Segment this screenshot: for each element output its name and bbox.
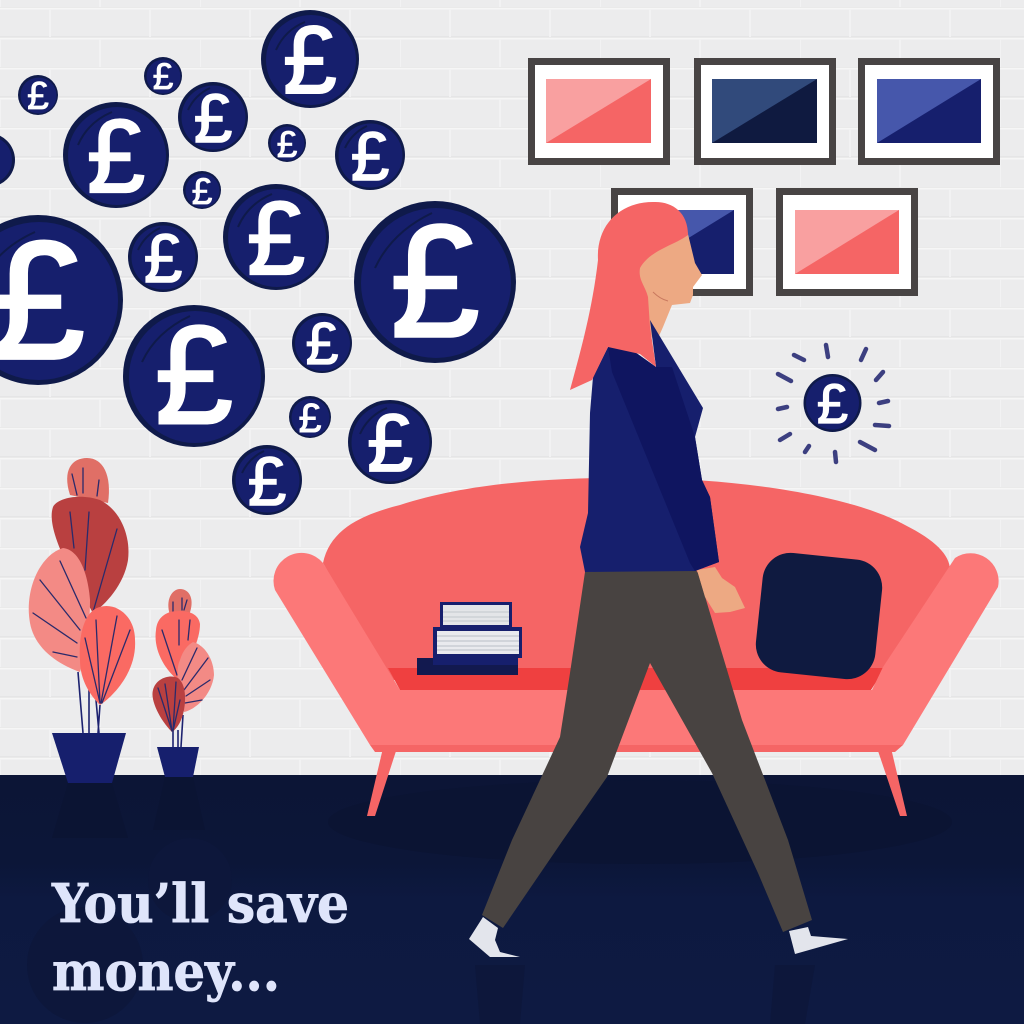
plant: small [152, 589, 214, 777]
caption: You'll save money: money... [52, 941, 280, 1003]
woman walking [469, 202, 848, 957]
coin [18, 75, 58, 118]
coin [268, 124, 306, 165]
coin: £ [306, 311, 338, 377]
trousers [482, 566, 812, 932]
top leaf [168, 589, 192, 615]
sofa legs [367, 748, 907, 816]
book stack [417, 602, 522, 675]
plant: large [29, 458, 135, 783]
neck and face [630, 205, 702, 345]
coral leaf [80, 606, 135, 705]
coin: £ [351, 118, 389, 195]
coin [144, 56, 182, 97]
coin [232, 443, 302, 520]
pound coins cluster [0, 7, 516, 520]
pot [157, 747, 199, 777]
coin [183, 171, 221, 212]
sofa frame and arms [273, 553, 999, 745]
coin [289, 395, 331, 441]
hair [570, 202, 688, 390]
right shoe [789, 927, 848, 954]
coin [223, 181, 329, 297]
pink leaf [177, 642, 214, 712]
left shoe [469, 917, 520, 957]
coin: £ [87, 99, 145, 215]
frame: coral lower [776, 188, 918, 296]
picture frames [528, 58, 1000, 296]
coin: £ [299, 395, 322, 441]
top leaf [67, 458, 109, 503]
brick wall background [0, 0, 1024, 776]
coin: £ [247, 181, 305, 297]
coin: £ [155, 298, 233, 453]
coin [261, 7, 359, 114]
frame: dark navy [694, 58, 836, 165]
pot [52, 733, 126, 783]
frame: blue [858, 58, 1000, 165]
stems [173, 715, 183, 747]
pink leaf [29, 548, 90, 672]
caption: You'll save money: You’ll save [51, 873, 349, 935]
coin: £ [367, 398, 413, 489]
small pound coin with rays [778, 345, 889, 462]
coin [354, 192, 516, 370]
coin: £ [153, 56, 173, 97]
coin [335, 118, 405, 195]
coin: £ [277, 124, 297, 165]
sofa base shadow [370, 745, 903, 752]
coin: £ [283, 7, 337, 114]
coin [123, 298, 265, 453]
coin: £ [144, 220, 182, 297]
coral leaf [156, 611, 200, 680]
coin: £ [194, 80, 232, 157]
coin [348, 398, 432, 489]
seat cushion [388, 668, 885, 690]
stems [78, 672, 100, 733]
coin [0, 208, 123, 394]
sofa back [323, 478, 950, 680]
coin: £ [391, 192, 479, 370]
coin: £ [248, 443, 286, 520]
sofa [273, 478, 999, 816]
dark leaf [152, 676, 185, 732]
chin line [653, 292, 668, 301]
coin [128, 220, 198, 297]
coin [63, 99, 169, 215]
floor [0, 775, 1024, 1024]
coin: £ [192, 171, 212, 212]
coin: £ [27, 75, 49, 118]
frame: coral [528, 58, 670, 165]
sweater [580, 320, 719, 572]
dark leaf [52, 497, 128, 613]
frame: blue behind head [611, 188, 753, 296]
coin [178, 80, 248, 157]
caption: You'll save money [51, 873, 349, 1003]
coin [292, 311, 352, 377]
coin (cut off at edge) [0, 133, 15, 187]
hand [697, 567, 745, 613]
pillow [753, 550, 885, 682]
small pound coin with rays: £ [817, 372, 848, 435]
